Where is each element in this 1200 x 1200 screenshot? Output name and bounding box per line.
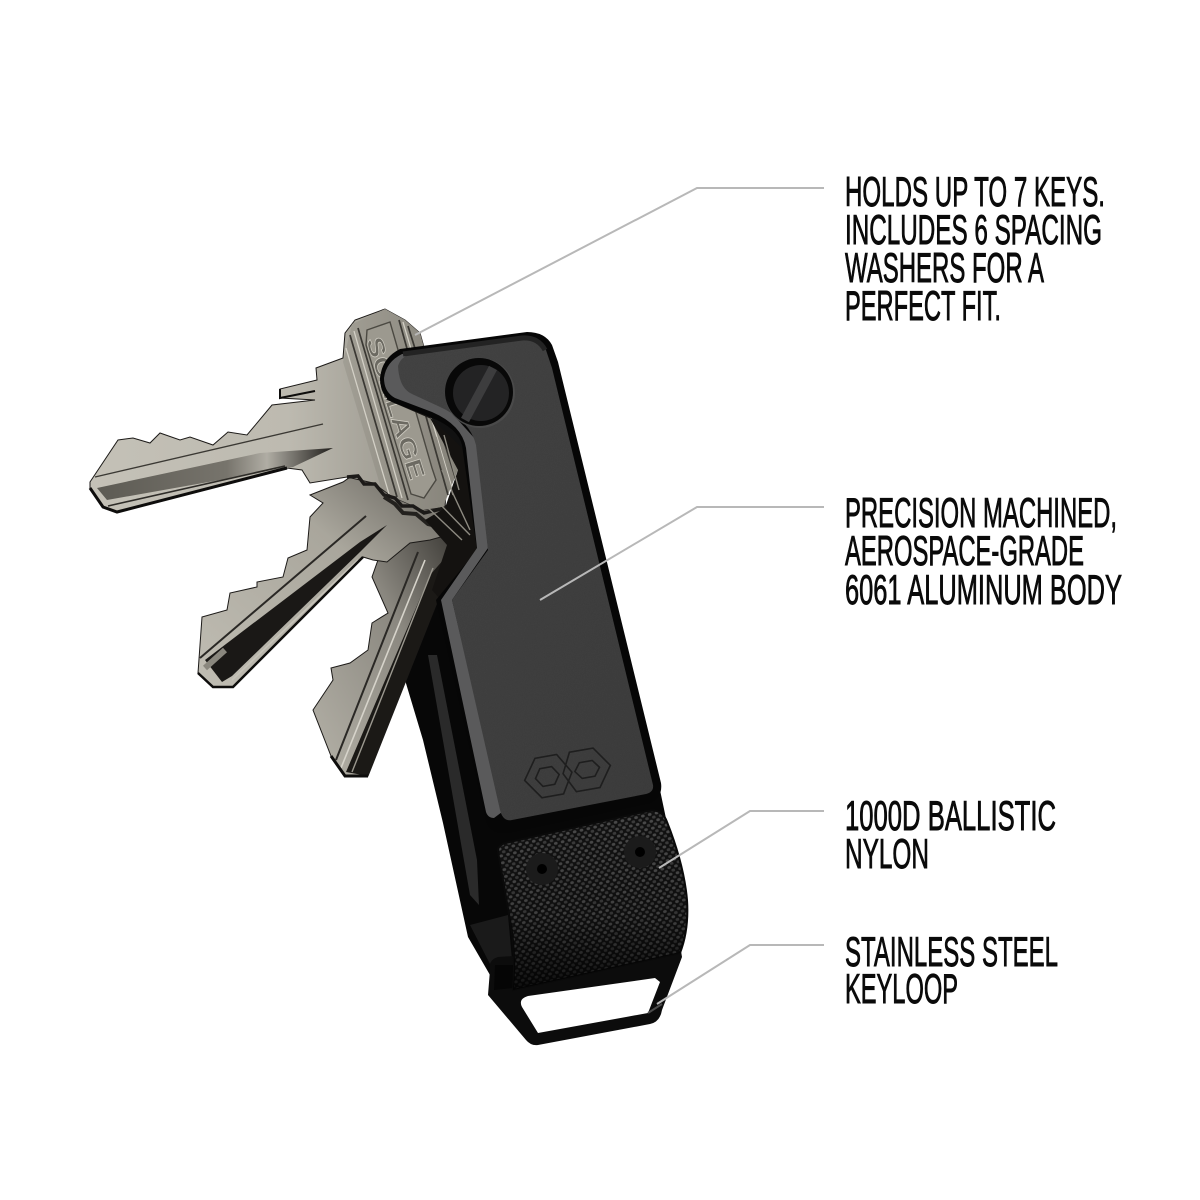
body grain texture [398,338,653,820]
leader line: nylon [659,811,824,868]
body face [398,338,653,820]
engraved logo [521,746,614,800]
key head: engraved band [343,309,458,528]
key 3: lower key [313,520,458,776]
key 1: top key with bow head [90,309,450,512]
key 2: middle key [198,470,455,687]
callout: ballistic nylon: 1000D BALLISTIC [845,792,1056,839]
strap backing behind the body [405,590,668,985]
callout: holds up to 7 keys: WASHERS FOR A [845,244,1044,291]
body outer edge [380,332,661,833]
dark gap between key stack and body [388,396,488,605]
callout: ballistic nylon: NYLON [845,830,929,877]
key brand text: SCHLAGE [361,334,431,483]
product: key organizer illustration [90,309,687,1045]
callout: stainless steel keyloop: KEYLOOP [845,965,958,1012]
leader line: keys [415,188,824,335]
nylon panel [498,810,687,990]
callout: holds up to 7 keys [845,168,1105,329]
aluminum body [380,332,661,833]
callout: precision machined [845,489,1122,613]
keyloop [488,945,682,1045]
leader line: keyloop [657,945,824,1004]
rivet right [624,836,656,868]
top edge shading [403,338,545,354]
leader line: body [540,507,824,600]
callout: ballistic nylon [845,792,1056,877]
rivet left [526,853,558,885]
screw [445,358,515,428]
body bevel [384,351,502,818]
callout: stainless steel keyloop [845,928,1058,1012]
callout: holds up to 7 keys: PERFECT FIT. [845,282,1001,329]
